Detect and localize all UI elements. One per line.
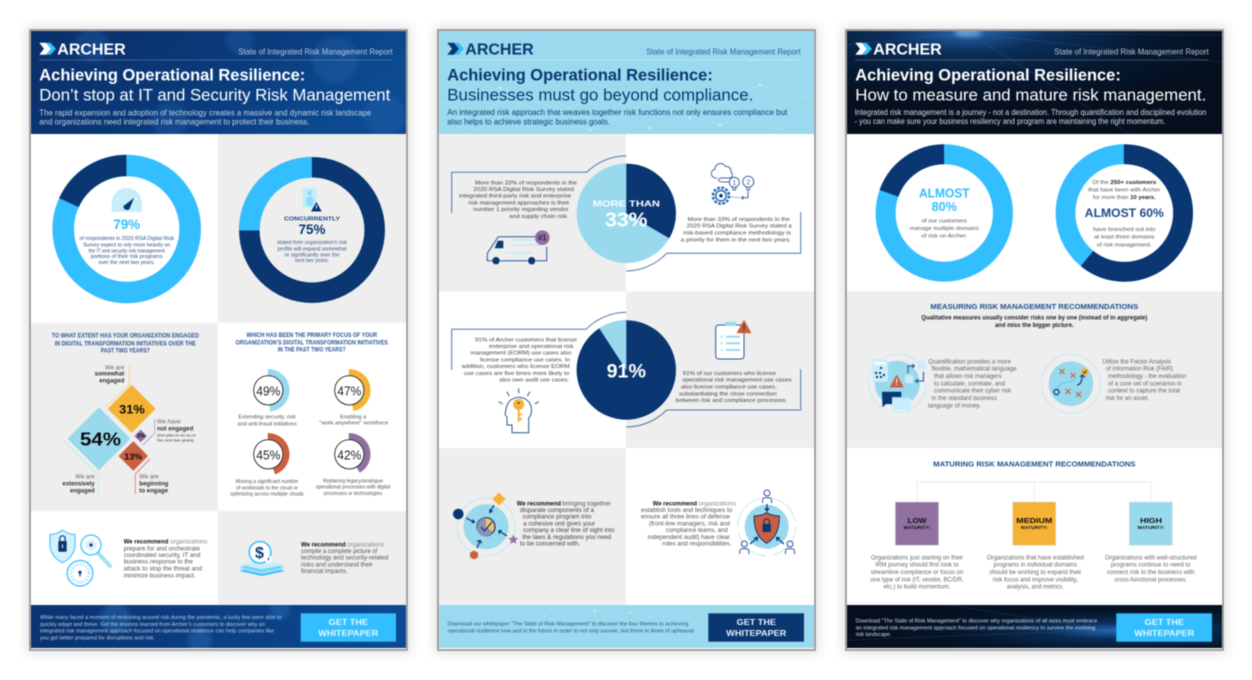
text: third-party risk finding: risk management approaches is their: [468, 200, 569, 206]
maturity card: high: HIGH: [1140, 516, 1162, 525]
button: get the whitepaper: [301, 613, 396, 642]
text: recommendation 2: We recommend: [301, 541, 346, 548]
label: security: [237, 415, 297, 428]
text: recommendation 1: coordinated security, IT and: [124, 552, 201, 559]
button: get the whitepaper: [1116, 613, 1212, 642]
text: recommendation 1: organizations: [170, 538, 207, 545]
text: FAIR: of Information Risk (FAIR): [1106, 366, 1173, 373]
panel: IT and security risk infographic: [30, 26, 407, 652]
text: low maturity advice: etc.) to build momentum.: [884, 584, 951, 591]
intro text: also helps to achieve strategic business goals.: [447, 117, 610, 126]
icon: dollar on stack: $: [255, 545, 264, 562]
chart: 42 percent radial: 42%: [337, 448, 362, 463]
icon: dollar on stack: [239, 542, 285, 576]
text: EORM finding: addition, customers who license EORM: [462, 364, 570, 370]
chart: engagement diamonds: 2%: [137, 434, 145, 440]
text: medium maturity advice: Organizations that have established: [987, 554, 1084, 561]
text: EORM finding: 91% of Archer customers that license: [475, 337, 577, 343]
text: recommendation 1: [124, 538, 207, 579]
text: recommendation 3: to be concerned with.: [520, 541, 580, 548]
text: FAIR: context to capture the total: [1108, 388, 1180, 395]
intro text: and organizations need integrated risk management to protect their business.: [39, 118, 309, 127]
text: medium maturity advice: should be working to expand their: [989, 569, 1081, 576]
donut chart: almost 80 percent: ALMOST: [919, 185, 970, 200]
footer text: integrated risk management approach focused on operational resilience can help companies like: [40, 629, 274, 635]
button: get the whitepaper: WHITEPAPER: [1134, 628, 1194, 638]
text: third-party risk finding: 2020 RSA Digital Risk Survey stated: [473, 187, 574, 193]
text: compliance methodology finding: risk-based compliance methodology is: [683, 231, 791, 237]
text: recommendation 4: [641, 500, 736, 548]
title: How to measure and mature risk management.: [855, 85, 1206, 104]
intro text: - you can make sure your business resiliency and program are maintaining the right momentum.: [855, 117, 1165, 126]
text: EORM finding: enterprise and operational risk: [489, 344, 574, 350]
maturity card: high: [1105, 502, 1197, 583]
text: risk profile finding: or significantly over the: [284, 252, 340, 258]
title: Achieving Operational Resilience:: [39, 65, 305, 84]
label: not engaged: not engaged: [157, 426, 194, 432]
text: high maturity advice: programs continue to need to: [1111, 562, 1191, 569]
label: somewhat engaged: We are: [105, 365, 125, 371]
text: compliance methodology finding: [681, 217, 793, 243]
text: low maturity advice: [870, 554, 964, 591]
label: extensively engaged: [62, 475, 95, 495]
stat: 75%: 75%: [298, 221, 326, 237]
label: extensively engaged: extensively: [62, 482, 95, 488]
chart: 45 percent radial: 45%: [256, 448, 281, 463]
label: not engaged: We have: [157, 419, 181, 425]
icon: cloud, bulbs and gear: 2: [746, 178, 750, 186]
footer text: operational resilience now and in the future in order to not only survive, but thrive in times of upheaval.: [448, 629, 695, 635]
text: multiple domains: manage multiple domains: [910, 226, 979, 232]
text: recommendation 3: company a clear line of sight into: [523, 527, 615, 534]
footer text: risk landscape.: [856, 632, 891, 638]
text: third-party risk finding: and supply chain risk.: [509, 214, 569, 220]
label: somewhat engaged: engaged: [99, 379, 125, 385]
chart: 49 percent radial: 49%: [256, 383, 281, 398]
text: recommendation 4: independent audit) have clear: [648, 534, 730, 541]
text: recommendation 2: risks and understand their: [301, 561, 373, 568]
text: recommendation 1: We recommend: [124, 538, 169, 545]
label: legacy processes: processes or technologies: [324, 491, 383, 497]
maturity card: low: LOW: [908, 516, 927, 525]
text: FAIR: Utilize the Factor Analysis: [1102, 358, 1171, 365]
text: medium maturity advice: programs in individual domains: [993, 562, 1077, 569]
text: medium maturity advice: risk focus and improve visibility,: [993, 576, 1078, 583]
text: operational risk finding: also license compliance use cases,: [681, 384, 777, 390]
heading: primary focus: WHICH HAS BEEN THE PRIMARY FOCUS OF YOUR: [246, 333, 378, 339]
heading: primary focus: [236, 333, 388, 354]
icon: clipboard with alert: [716, 321, 751, 359]
button: get the whitepaper: GET THE: [737, 617, 776, 627]
text: three domains: have branched out into: [1093, 227, 1155, 233]
icon: shield, eye and lock: [50, 530, 110, 586]
text: survey finding: of respondents in 2020 RSA Digital Risk: [79, 236, 174, 242]
text: quantification: Quantification provides a more: [928, 358, 1011, 365]
label: somewhat engaged: somewhat: [95, 372, 124, 378]
icon: cloud, bulbs and gear: 1: [732, 180, 736, 187]
label: work anywhere: Enabling a: [340, 414, 366, 420]
label: extensively engaged: engaged: [70, 489, 95, 495]
intro text: An integrated risk approach that weaves together risk functions not only ensures compliance but: [447, 108, 788, 117]
chart: engagement diamonds: 54%: [80, 430, 121, 450]
text: low maturity advice: streamline compliance or focus on: [871, 569, 964, 576]
footer text: While many faced a moment of reckoning around risk during the pandemic, a lucky few were able to: [40, 615, 282, 621]
text: survey finding: [79, 236, 174, 266]
label: clouds: of workloads to the cloud or: [236, 485, 298, 491]
footer text: Download "The State of Risk Management" to discover why organizations of all sizes must embrace: [856, 619, 1097, 625]
text: quantification: in the standard business: [932, 395, 997, 402]
icon: key in head: [499, 388, 539, 433]
footer: panel 1: [30, 604, 407, 649]
footer text: [856, 619, 1097, 638]
heading: digital transformation engagement: IN DIGITAL TRANSFORMATION INITIATIVES OVER THE: [55, 341, 196, 347]
text: third-party risk finding: number 1 priority regarding vendor: [473, 207, 569, 213]
chart: 47 percent radial: 47%: [337, 383, 362, 398]
text: quantification: to calculate, correlate, and: [934, 380, 1005, 387]
logo: Archer: ARCHER: [873, 41, 942, 58]
donut chart: almost 60 percent: [1066, 154, 1183, 272]
text: recommendation 2: financial impacts.: [301, 568, 348, 575]
pie chart: more than 33 percent: MORE THAN: [593, 199, 660, 209]
icon: cloud, bulbs and gear: [711, 164, 754, 204]
chart: 49 percent radial: [237, 372, 297, 428]
label: legacy processes: operational processes with digital: [316, 485, 390, 491]
icon: gauge: [112, 188, 142, 212]
text: operational risk finding: substantiating the close connection: [679, 391, 777, 397]
heading: maturing recommendations: MATURING RISK MANAGEMENT RECOMMENDATIONS: [933, 460, 1135, 469]
text: EORM finding: management (EORM) use cases also: [471, 351, 571, 357]
text: multiple domains: of risk on Archer.: [921, 234, 968, 240]
text: risk profile finding: profile will expand somewhat: [278, 247, 347, 253]
label: beginning to engage: to engage: [139, 489, 169, 495]
text: low maturity advice: one type of risk (IT, vendor, BC/DR,: [870, 576, 964, 583]
report label: State of Integrated Risk Management Report: [1054, 47, 1209, 57]
text: recommendation 2: [301, 541, 389, 575]
subheading: qualitative measures: and miss the bigger picture.: [995, 322, 1074, 329]
text: operational risk finding: between risk and compliance processes.: [676, 398, 788, 404]
text: FAIR: [1102, 358, 1187, 402]
icon: quantification: [868, 354, 926, 413]
text: recommendation 3: the laws & regulations you need: [522, 534, 612, 541]
pie chart: more than 33 percent: [452, 156, 801, 271]
chart: 47 percent radial: [319, 372, 388, 427]
text: quantification: communicate their cyber risk: [934, 388, 1012, 395]
panel: measure and mature infographic: [846, 29, 1223, 650]
text: risk profile finding: stated their organization’s risk: [277, 240, 348, 246]
text: recommendation 3: We recommend: [517, 500, 561, 507]
button: get the whitepaper: [708, 613, 804, 642]
donut chart: almost 80 percent: [869, 138, 1020, 288]
text: high maturity advice: connect risk to the business with: [1107, 569, 1195, 576]
pie chart: 91 percent: [452, 312, 801, 427]
text: quantification: language of money.: [928, 402, 981, 409]
text: quantification: [928, 358, 1017, 409]
button: get the whitepaper: WHITEPAPER: [318, 628, 378, 638]
heading: digital transformation engagement: TO WHAT EXTENT HAS YOUR ORGANIZATION ENGAGED: [52, 334, 199, 340]
heading: primary focus: ORGANIZATION’S DIGITAL TRANSFORMATION INITIATIVES: [236, 340, 388, 346]
text: long-term customers: Of the 250+ customers: [1092, 180, 1156, 186]
text: recommendation 4: (front-line managers, risk and: [649, 520, 731, 527]
text: compliance methodology finding: More than 33% of respondents in the: [688, 217, 790, 223]
title: [855, 65, 1206, 104]
donut chart: 75 percent: [249, 167, 375, 293]
icon: risk scenario play map: [1042, 354, 1100, 413]
title: Businesses must go beyond compliance.: [447, 85, 753, 104]
panel: beyond compliance infographic: [438, 30, 815, 650]
text: recommendation 2: compile a complete picture of: [301, 548, 378, 555]
chart: engagement diamonds: 31%: [119, 403, 145, 417]
footer: panel 2: [439, 605, 814, 648]
text: long-term customers: [1088, 180, 1160, 201]
text: three domains: [1093, 227, 1155, 248]
text: medium maturity advice: [987, 554, 1084, 591]
header band: panel 1: [31, 26, 406, 138]
text: EORM finding: license compliance use cases. In: [480, 357, 570, 363]
label: work anywhere: "work anywhere" workforce: [319, 421, 388, 427]
heading: digital transformation engagement: PAST TWO YEARS?: [101, 349, 150, 355]
text: recommendation 3: [517, 500, 615, 548]
text: three domains: at least three domains: [1094, 235, 1155, 241]
footer text: [448, 622, 695, 635]
text: survey finding: over the next two years.: [98, 260, 155, 266]
intro text: Integrated risk management is a journey - not a destination. Through quantification and disciplined evolution: [855, 108, 1206, 117]
text: recommendation 1: business response to the: [124, 559, 193, 566]
text: recommendation 3: compliance program into: [523, 514, 592, 521]
stat: almost 60%: ALMOST 60%: [1085, 208, 1164, 220]
maturity card: low: [870, 502, 964, 591]
text: recommendation 1: attack to stop the threat and: [124, 565, 202, 572]
text: recommendation 1: prepare for and orchestrate: [124, 545, 200, 552]
text: multiple domains: of our customers: [922, 218, 967, 224]
text: multiple domains: [910, 218, 979, 240]
text: FAIR: risk for an asset.: [1106, 395, 1149, 402]
chart: 42 percent radial: [316, 436, 390, 497]
footer text: Download our whitepaper "The State of Risk Management" to discover the four themes to achieving: [448, 622, 688, 628]
header band: panel 2: [439, 31, 814, 134]
label: work anywhere: [319, 414, 388, 427]
text: high maturity advice: cross-functional processes.: [1114, 576, 1187, 583]
chart: engagement diamonds: 13%: [124, 451, 143, 461]
text: recommendation 3: a cohesive unit gives your: [523, 520, 595, 527]
logo: Archer: ARCHER: [465, 41, 534, 58]
label: not engaged: (but plan to do so in: [157, 434, 196, 438]
donut chart: almost 80 percent: 80%: [932, 199, 957, 214]
label: somewhat engaged: [95, 365, 125, 385]
text: high maturity advice: [1105, 554, 1197, 583]
label: extensively engaged: We are: [75, 475, 95, 481]
label: not engaged: the next two years): [157, 439, 195, 443]
title: [447, 65, 753, 104]
text: survey finding: Survey expect to rely more heavily on: [83, 242, 170, 248]
subheading: qualitative measures: Qualitative measures usually consider risks one by one (instead of in aggregate): [921, 314, 1147, 321]
text: long-term customers: that have been with Archer: [1088, 187, 1160, 193]
icon: delivery van: [487, 230, 550, 264]
chart: engagement diamonds: [62, 365, 196, 495]
text: operational risk finding: operational risk management use cases: [682, 378, 792, 384]
button: get the whitepaper: WHITEPAPER: [726, 628, 786, 638]
maturity card: medium: MEDIUM: [1016, 516, 1052, 525]
footer text: you get better prepared for disruptions and risk.: [40, 635, 155, 641]
text: recommendation 1: minimize business impact.: [124, 572, 196, 579]
title: Don’t stop at IT and Security Risk Management: [39, 85, 391, 104]
text: compliance methodology finding: 2020 RSA Digital Risk Survey stated a: [687, 224, 793, 230]
text: quantification: flexible, mathematical language: [932, 366, 1017, 373]
text: third-party risk finding: integrated third-party risk and enterprise: [459, 194, 571, 200]
label: not engaged: [157, 419, 196, 443]
text: EORM finding: also own audit use cases.: [499, 378, 570, 384]
maturity card: high: MATURITY:: [1138, 525, 1165, 530]
heading: primary focus: IN THE PAST TWO YEARS?: [278, 348, 346, 354]
maturity card: medium: MATURITY:: [1021, 525, 1048, 530]
label: legacy processes: [316, 479, 390, 497]
text: recommendation 4: establish tools and techniques to: [641, 507, 733, 514]
text: risk profile finding: [277, 240, 348, 264]
report label: State of Integrated Risk Management Report: [646, 47, 801, 57]
label: concurrently: CONCURRENTLY: [284, 217, 340, 223]
icon: delivery van: #1: [538, 234, 547, 243]
icon: shield with three people: [738, 490, 796, 556]
pie chart: more than 33 percent: 33%: [605, 210, 648, 232]
title: [39, 65, 391, 104]
footer text: an integrated risk management approach focused on operational resiliency to survive the evolving: [856, 625, 1095, 631]
label: clouds: Moving a significant number: [236, 479, 299, 485]
title: Achieving Operational Resilience:: [855, 65, 1121, 84]
text: FAIR: methodology - the evaluation: [1108, 373, 1187, 380]
subheading: qualitative measures: [921, 314, 1147, 329]
logo: Archer: ARCHER: [57, 41, 126, 58]
intro text: The rapid expansion and adoption of technology creates a massive and dynamic risk landscape: [39, 108, 372, 117]
text: long-term customers: for more than 10 years.: [1093, 195, 1156, 201]
text: operational risk finding: [676, 371, 792, 404]
heading: measuring recommendations: MEASURING RISK MANAGEMENT RECOMMENDATIONS: [930, 302, 1138, 311]
label: clouds: optimizing across multiple clouds: [230, 492, 304, 498]
footer text: [40, 615, 282, 641]
label: security: Extending security, risk: [238, 415, 296, 421]
text: survey finding: the IT and security risk management: [89, 248, 165, 254]
text: low maturity advice: Organizations just starting on their: [871, 554, 963, 561]
text: FAIR: of a core set of scenarios in: [1108, 380, 1182, 387]
text: risk profile finding: next two years.: [295, 258, 329, 264]
text: survey finding: portions of their risk programs: [91, 254, 163, 260]
text: recommendation 4: ensure all three lines of defense: [641, 514, 731, 521]
footer text: quickly adapt and thrive. Get the lessons learned from Archer’s customers to discover why an: [40, 622, 265, 628]
header band: panel 3: [847, 29, 1222, 134]
text: recommendation 3: bringing together: [562, 500, 611, 507]
maturity card: low: MATURITY:: [904, 525, 931, 530]
intro text: [855, 108, 1206, 126]
text: recommendation 2: technology and security-related: [301, 555, 389, 562]
label: security: and anti-fraud initiatives: [237, 422, 297, 428]
text: EORM finding: use cases are five times more likely to: [464, 371, 569, 377]
label: clouds: [230, 479, 304, 498]
text: third-party risk finding: More than 33% of respondents in the: [475, 180, 577, 186]
report label: State of Integrated Risk Management Report: [238, 47, 393, 57]
button: get the whitepaper: GET THE: [329, 617, 368, 627]
icon: profile with warning: [303, 188, 322, 212]
text: recommendation 4: compliance teams, and: [666, 527, 728, 534]
text: three domains: of risk management.: [1097, 242, 1152, 248]
title: Achieving Operational Resilience:: [447, 65, 713, 84]
text: recommendation 3: disparate components of a: [520, 507, 595, 514]
footer: panel 3: [847, 605, 1222, 648]
heading: digital transformation engagement: [52, 334, 199, 355]
text: quantification: that allows risk managers: [934, 373, 1002, 380]
stat: 79%: 79%: [113, 216, 141, 232]
text: operational risk finding: 91% of our customers who license: [683, 371, 776, 377]
label: beginning to engage: We are: [139, 475, 159, 481]
label: beginning to engage: beginning: [139, 482, 169, 488]
text: medium maturity advice: analysis, and metrics.: [1007, 584, 1064, 591]
text: high maturity advice: Organizations with well-structured: [1105, 554, 1197, 561]
text: low maturity advice: IRM journey should first look to: [875, 562, 959, 569]
donut chart: 79 percent: [42, 145, 211, 313]
intro text: [39, 108, 372, 127]
text: recommendation 4: We recommend: [653, 500, 697, 507]
text: EORM finding: [462, 337, 577, 384]
intro text: [447, 108, 788, 126]
pie chart: 91 percent: 91%: [607, 361, 646, 382]
label: legacy processes: Replacing legacy/analogue: [323, 479, 383, 485]
text: recommendation 4: roles and responsibilities.: [662, 541, 732, 548]
maturity card: medium: [987, 502, 1084, 591]
text: third-party risk finding: [459, 180, 577, 220]
label: beginning to engage: [139, 475, 169, 495]
button: get the whitepaper: GET THE: [1145, 617, 1184, 627]
text: recommendation 4: organizations: [698, 500, 736, 507]
text: recommendation 2: organizations: [347, 541, 384, 548]
chart: 45 percent radial: [230, 436, 304, 498]
icon: converging compliance components: [453, 492, 518, 560]
text: compliance methodology finding: a priority for them in the next two years.: [681, 237, 791, 243]
